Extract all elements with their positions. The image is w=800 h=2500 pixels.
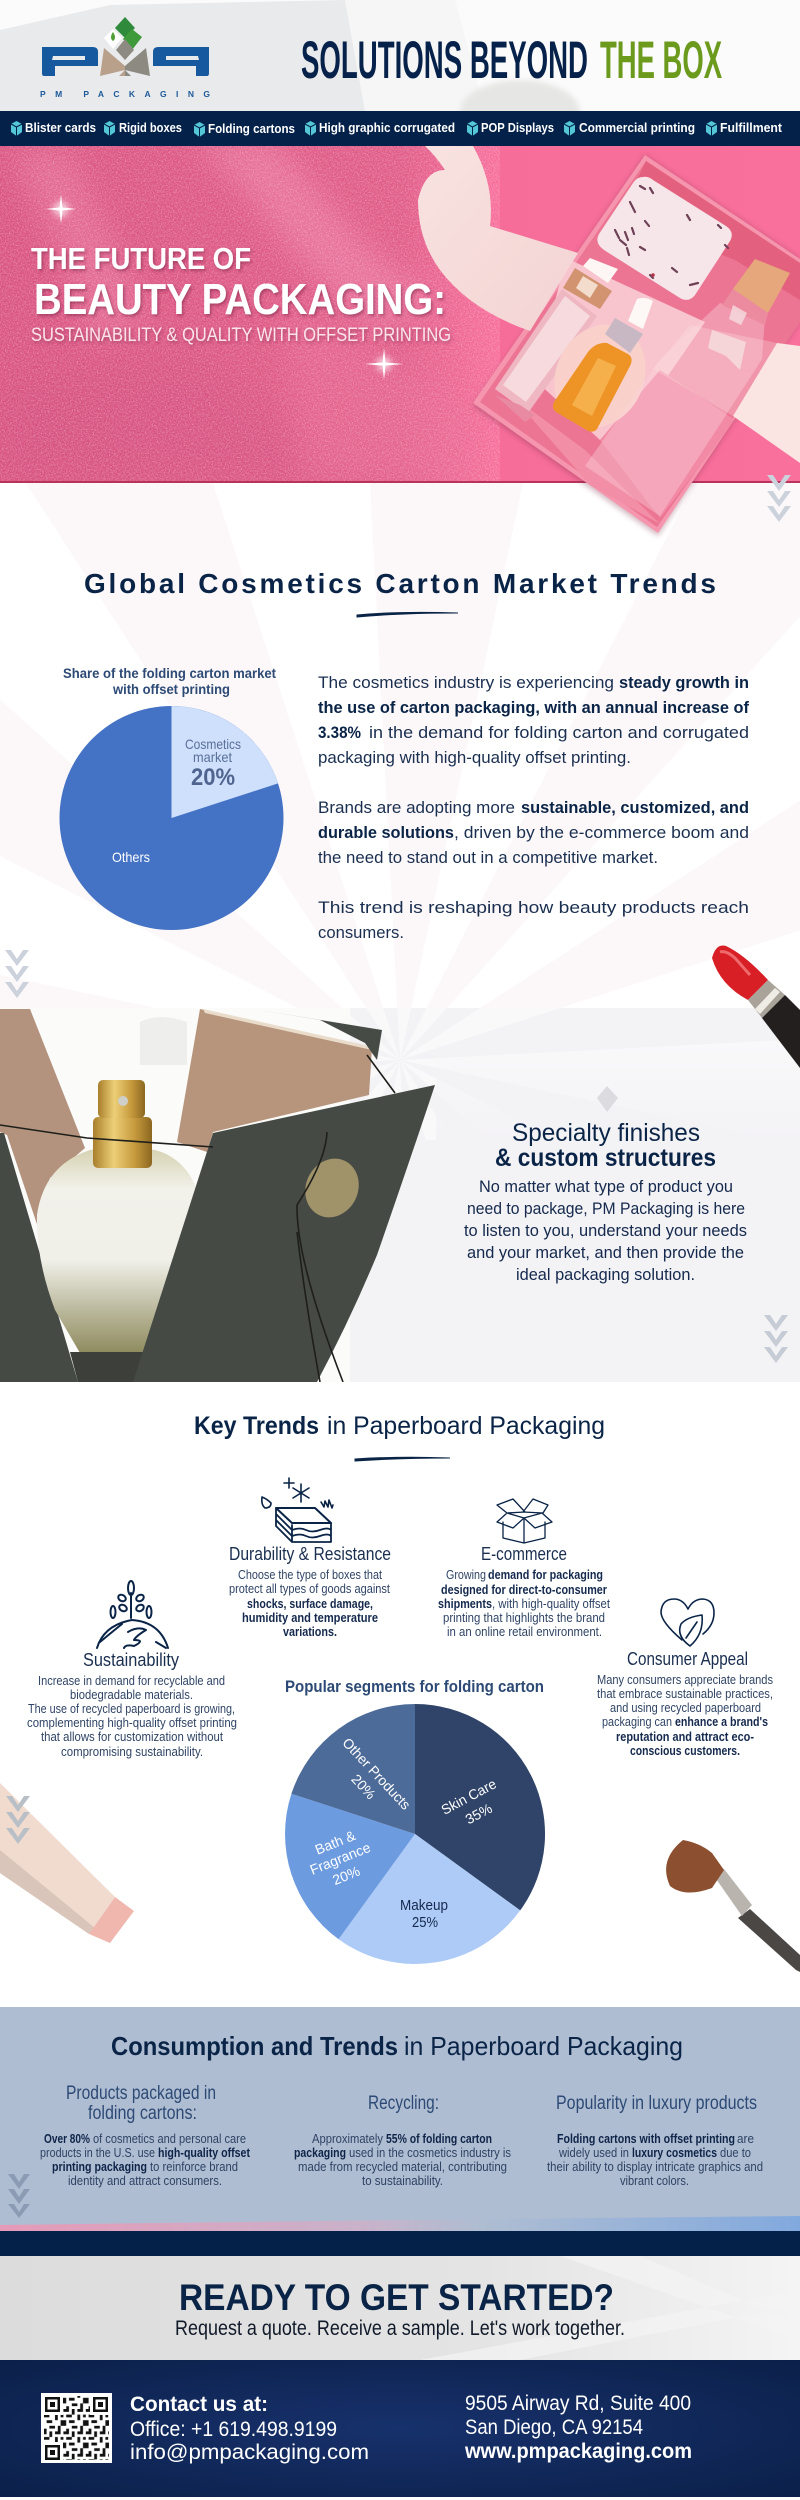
text block: specialty finishes: Specialty finishes: [512, 1119, 700, 1147]
trend: consumer appeal: packaging can: [602, 1715, 672, 1729]
text block: market trends: , driven by the e-commerce boom and: [454, 824, 749, 842]
text block: market trends: 3.38%: [318, 724, 361, 742]
trend: e-commerce: printing that highlights the brand: [443, 1611, 605, 1625]
column: recycling: made from recycled material, contributing: [298, 2160, 507, 2174]
trend: sustainability: complementing high-quality offset printing: [27, 1716, 237, 1730]
call to action: Request a quote. Receive a sample. Let's work together.: [175, 2317, 625, 2340]
column: popularity in luxury products: luxury cosmetics: [632, 2146, 717, 2160]
trend: sustainability: that allows for customization without: [41, 1730, 223, 1744]
heading: Key Trends: in Paperboard Packaging: [327, 1412, 605, 1440]
heading: Global Cosmetics Carton Market Trends: Global Cosmetics Carton Market Trends: [84, 568, 716, 599]
column: products packaged: to reinforce brand: [150, 2160, 238, 2174]
dish: [538, 309, 662, 443]
trend: e-commerce: demand for packaging: [488, 1568, 603, 1582]
serum bottle: [553, 298, 653, 432]
heading: Key Trends: [194, 1412, 605, 1461]
label: makeup: 25%: [412, 1914, 438, 1931]
column: recycling: 55% of folding carton: [386, 2132, 492, 2146]
column: popularity in luxury products: widely used in: [558, 2146, 629, 2160]
icon: heart with leaf: [661, 1599, 714, 1646]
trend: e-commerce: Growing: [446, 1568, 486, 1582]
icon: open box: [497, 1499, 552, 1543]
trend: consumer appeal: Consumer Appeal: [627, 1649, 748, 1669]
clear glass bottle: [585, 259, 790, 516]
chart: popular segments for folding carton: Popular segments for folding carton: [285, 1677, 544, 1696]
trend: consumer appeal: that embrace sustainable practices,: [597, 1687, 773, 1701]
column: recycling: packaging: [294, 2146, 346, 2160]
address: 9505 Airway Rd, Suite 400: [465, 2392, 691, 2415]
nav item: High graphic corrugated: High graphic corrugated: [319, 120, 455, 135]
lipstick: [712, 946, 800, 1068]
contact details: Office: +1 619.498.9199: [130, 2418, 337, 2441]
hero product photo: open pink box with cosmetics: [418, 146, 800, 536]
contact details: info@pmpackaging.com: [130, 2441, 369, 2464]
text block: market trends: [318, 674, 749, 942]
sparkle: [364, 348, 404, 380]
label: makeup: [400, 1897, 448, 1931]
text block: market trends: Brands are adopting more: [318, 799, 515, 817]
label: makeup: Makeup: [400, 1897, 448, 1914]
text block: market trends: the use of carton packaging, with an annual increase of: [318, 699, 749, 717]
slice: makeup: [339, 1834, 520, 1964]
trend: consumer appeal: and using recycled paperboard: [610, 1701, 761, 1715]
trend: durability and resistance: variations.: [283, 1625, 337, 1639]
box interior: [480, 161, 800, 527]
column: products packaged: high-quality offset: [158, 2146, 251, 2160]
text block: market trends: consumers.: [318, 924, 404, 942]
logo: PM Packaging: [40, 17, 210, 99]
text block: specialty finishes: to listen to you, understand your needs: [464, 1221, 747, 1240]
heading: Key Trends: Key Trends: [194, 1412, 319, 1440]
column: recycling: [294, 2093, 511, 2188]
QR code: [41, 2393, 112, 2463]
slice: other products: [291, 1704, 415, 1834]
section: consumption and trends: [0, 2007, 800, 2231]
nav item: Rigid boxes: [104, 120, 182, 136]
bottle: [37, 1080, 198, 1382]
trend: durability and resistance: shocks, surface damage,: [247, 1597, 373, 1611]
trend: consumer appeal: enhance a brand's: [675, 1715, 768, 1729]
label: bath and fragrance: Bath &: [313, 1827, 358, 1858]
text block: market trends: sustainable, customized, and: [521, 799, 749, 817]
address: San Diego, CA 92154: [465, 2416, 643, 2439]
heading: consumption and trends: [111, 2031, 683, 2061]
chart: share of folding carton market: [60, 665, 284, 930]
column: recycling: to sustainability.: [362, 2174, 443, 2188]
text block: specialty finishes: & custom structures: [495, 1144, 716, 1172]
trend: sustainability: Increase in demand for recyclable and: [38, 1674, 225, 1688]
trend: durability and resistance: Durability & Resistance: [229, 1544, 391, 1564]
contact details: [130, 2393, 369, 2464]
chart: share of folding carton market: Others: [112, 849, 150, 865]
trend: sustainability: Sustainability: [83, 1650, 179, 1670]
trend: e-commerce: designed for direct-to-consumer: [441, 1583, 607, 1597]
column: popularity in luxury products: Folding cartons with offset printing: [557, 2132, 735, 2146]
trend: sustainability: The use of recycled paperboard is growing,: [28, 1702, 235, 1716]
nav item: Commercial printing: Commercial printing: [579, 120, 695, 135]
heading: consumption and trends: in Paperboard Packaging: [404, 2031, 683, 2061]
text block: market trends: the need to stand out in a competitive market.: [318, 849, 658, 867]
decorative chevrons: hero: [767, 475, 791, 522]
hero banner background: [0, 140, 800, 483]
label: bath and fragrance: [308, 1827, 373, 1888]
column: recycling: Approximately: [312, 2132, 384, 2146]
text block: market trends: The cosmetics industry is experiencing: [318, 674, 614, 692]
text block: specialty finishes: No matter what type of product you: [479, 1177, 733, 1196]
trend: sustainability: compromising sustainability.: [61, 1745, 203, 1759]
header band: [0, 0, 800, 144]
label: bath and fragrance: Fragrance: [308, 1839, 373, 1878]
column: products packaged: [40, 2083, 251, 2188]
text block: specialty finishes: need to package, PM Packaging is here: [467, 1199, 745, 1218]
label: other products: Other Products: [339, 1734, 414, 1813]
nav item: POP Displays: POP Displays: [481, 120, 554, 135]
column: products packaged: products in the U.S. use: [40, 2146, 155, 2160]
icon: plant on globe: [97, 1581, 168, 1648]
decorative chevrons: market section: [5, 950, 29, 998]
column: popularity in luxury products: vibrant colors.: [620, 2174, 689, 2188]
ribbon loop: [418, 146, 578, 331]
column: popularity in luxury products: Popularity in luxury products: [556, 2093, 757, 2114]
hero title: THE FUTURE OF: [31, 241, 251, 276]
icon: layered board with weather: [262, 1478, 333, 1542]
column: products packaged: Products packaged in: [66, 2083, 216, 2104]
navigation bar: [0, 111, 800, 146]
label: skin care: 35%: [463, 1800, 495, 1827]
trend: e-commerce: , with high-quality offset: [492, 1597, 610, 1611]
text block: specialty finishes: and your market, and then provide the: [467, 1243, 744, 1262]
trend: durability and resistance: [229, 1478, 391, 1639]
text block: market trends: This trend is reshaping how beauty products reach: [318, 899, 749, 917]
column: popularity in luxury products: their ability to display intricate graphics and: [547, 2160, 763, 2174]
text block: specialty finishes: [464, 1119, 747, 1284]
trend: sustainability: biodegradable materials.: [70, 1688, 193, 1702]
navy divider band: [0, 2231, 800, 2256]
label: bath and fragrance: 20%: [330, 1863, 362, 1888]
column: products packaged: printing packaging: [52, 2160, 147, 2174]
text block: market trends: steady growth in: [619, 674, 749, 692]
trend: durability and resistance: humidity and temperature: [242, 1611, 378, 1625]
slice: skin care: [415, 1704, 545, 1910]
nav item: Rigid boxes: Rigid boxes: [119, 120, 182, 135]
gold seal: [296, 1150, 368, 1226]
column: products packaged: of cosmetics and personal care: [93, 2132, 246, 2146]
column: products packaged: Over 80%: [44, 2132, 90, 2146]
trend: durability and resistance: Choose the type of boxes that: [238, 1568, 382, 1582]
soap bar: [597, 177, 732, 300]
cosmetic tube: [0, 1783, 134, 1943]
footer: [0, 2360, 800, 2497]
nav item: Folding cartons: Folding cartons: [208, 121, 295, 136]
trend: e-commerce: in an online retail environment.: [447, 1625, 602, 1639]
heading: consumption and trends: Consumption and Trends: [111, 2031, 398, 2061]
chart: share of folding carton market: 20%: [191, 764, 235, 791]
hero title: [31, 241, 451, 346]
column: popularity in luxury products: [547, 2093, 763, 2188]
address: www.pmpackaging.com: [464, 2440, 692, 2463]
nav item: Blister cards: Blister cards: [25, 120, 96, 135]
label: skin care: Skin Care: [438, 1775, 499, 1818]
section: key trends background: [0, 1382, 800, 2007]
trend: consumer appeal: [597, 1599, 773, 1758]
chart: share of folding carton market: with offset printing: [112, 681, 230, 697]
photo: perfume bottle in black carton: [0, 1008, 435, 1382]
text block: market trends: in the demand for folding carton and corrugated: [369, 724, 749, 742]
column: products packaged: identity and attract consumers.: [68, 2174, 222, 2188]
text block: market trends: durable solutions: [318, 824, 454, 842]
trend: consumer appeal: reputation and attract eco-: [616, 1730, 754, 1744]
column: popularity in luxury products: due to: [720, 2146, 751, 2160]
decorative chevrons: consumption section: [8, 2174, 30, 2218]
call to action: [0, 2256, 800, 2360]
contact details: Contact us at:: [130, 2393, 268, 2416]
logo: PM Packaging: PM PACKAGING: [40, 89, 210, 99]
trend: e-commerce: [438, 1499, 610, 1639]
hero title: SUSTAINABILITY & QUALITY WITH OFFSET PRINTING: [31, 324, 451, 346]
section: global cosmetics market background: [0, 360, 800, 1760]
watermark logo mark: [597, 1086, 618, 1112]
section: specialty finishes background: [350, 1008, 800, 1382]
front carton flap: [133, 1085, 435, 1382]
column: products packaged: folding cartons:: [88, 2103, 197, 2124]
chart: share of folding carton market: Cosmetics: [185, 736, 241, 752]
trend: durability and resistance: protect all types of goods against: [229, 1582, 390, 1596]
nav item: Fulfillment: Fulfillment: [720, 120, 783, 135]
column: recycling: Recycling:: [368, 2093, 439, 2114]
address: [464, 2392, 692, 2463]
chart: popular segments for folding carton: [285, 1677, 545, 1964]
heading: Global Cosmetics Carton Market Trends: [84, 568, 716, 617]
hero title: BEAUTY PACKAGING:: [34, 275, 446, 324]
call to action: READY TO GET STARTED?: [179, 2277, 614, 2318]
lower ribbon: [653, 325, 800, 463]
pearl bottle: [495, 258, 618, 422]
trend: consumer appeal: Many consumers appreciate brands: [597, 1673, 773, 1687]
column: recycling: used in the cosmetics industry is: [349, 2146, 511, 2160]
trend: e-commerce: shipments: [438, 1597, 492, 1611]
trend: sustainability: [27, 1581, 237, 1759]
trend: consumer appeal: conscious customers.: [630, 1744, 740, 1758]
column: popularity in luxury products: are: [737, 2132, 754, 2146]
chart: share of folding carton market: market: [193, 749, 232, 765]
text block: market trends: packaging with high-quality offset printing.: [318, 749, 631, 767]
decorative chevrons: key trends section: [6, 1796, 30, 1844]
sparkle: [46, 194, 76, 224]
chart: share of folding carton market: Share of the folding carton market: [63, 665, 276, 681]
label: other products: 20%: [348, 1771, 379, 1802]
decorative chevrons: specialty section: [764, 1315, 788, 1363]
trend: e-commerce: E-commerce: [481, 1544, 567, 1564]
slice: bath and fragrance: [285, 1794, 415, 1939]
strings: [0, 1055, 395, 1382]
makeup brush: [666, 1840, 800, 1972]
text block: specialty finishes: ideal packaging solution.: [516, 1265, 695, 1284]
